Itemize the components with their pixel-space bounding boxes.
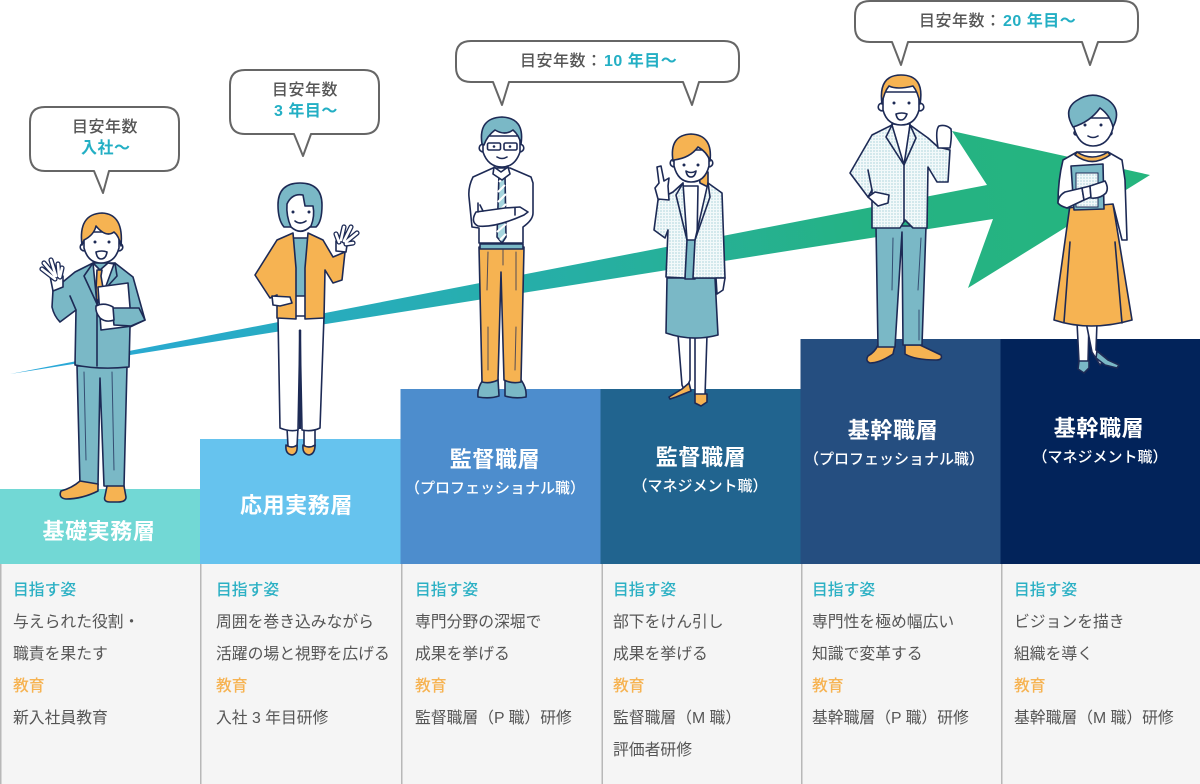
text block: 監督職層 M: 目指す姿 — [613, 581, 676, 599]
text block: 監督職層 P: 教育 — [415, 677, 447, 695]
illustration: male supervisor with glasses — [469, 117, 533, 398]
text block: 監督職層 M: 部下をけん引し — [613, 613, 724, 631]
text block: 基幹職層 M: 教育 — [1014, 677, 1046, 695]
text block: 基幹職層 M: 組織を導く — [1014, 644, 1093, 663]
step: 基幹職層 マネジメント職 — [1000, 339, 1200, 564]
text block: 監督職層 M — [613, 581, 741, 759]
callout: 10 年目〜: 目安年数： — [520, 53, 603, 70]
text block: 基幹職層 P — [812, 581, 969, 727]
text block: 監督職層 P: 成果を挙げる — [415, 645, 510, 663]
panel: lower background — [0, 564, 1200, 784]
text block: 基礎実務層: 新入社員教育 — [13, 709, 108, 727]
callout: 3 年目〜 — [230, 70, 379, 156]
step: 基幹職層 マネジメント職: （マネジメント職） — [1032, 449, 1168, 466]
illustration: female senior manager — [1054, 95, 1132, 373]
callout: 10 年目〜 — [456, 41, 739, 105]
step: 応用実務層: 応用実務層 — [240, 493, 353, 518]
text block: 監督職層 P: 監督職層（P 職）研修 — [415, 709, 572, 727]
text block: 応用実務層: 入社 3 年目研修 — [216, 709, 329, 727]
illustration: new employee — [42, 213, 145, 502]
callout: 20 年目〜: 20 年目〜 — [1003, 11, 1076, 30]
text block: 監督職層 P: 目指す姿 — [415, 581, 478, 599]
callout: 20 年目〜: 目安年数： — [919, 13, 1002, 30]
text block: 監督職層 M: 成果を挙げる — [613, 645, 708, 663]
growth arrow — [10, 131, 1150, 374]
step: 基幹職層 プロフェッショナル職: （プロフェッショナル職） — [804, 451, 984, 468]
step: 監督職層 マネジメント職 — [600, 389, 800, 564]
illustration: male senior professional — [850, 75, 951, 363]
text block: 基幹職層 M: 基幹職層（M 職）研修 — [1014, 709, 1174, 727]
step: 監督職層 マネジメント職: （マネジメント職） — [632, 478, 768, 495]
text block: 基幹職層 P: 知識で変革する — [812, 645, 923, 663]
text block: 基幹職層 P: 専門性を極め幅広い — [812, 613, 954, 631]
text block: 応用実務層: 活躍の場と視野を広げる — [216, 645, 390, 663]
callout: 入社〜: 目安年数 — [72, 118, 138, 136]
text block: 基礎実務層: 与えられた役割・ — [13, 613, 139, 631]
callout: 3 年目〜: 3 年目〜 — [274, 101, 338, 120]
text block: 基礎実務層 — [13, 581, 139, 727]
step: 監督職層 プロフェッショナル職: （プロフェッショナル職） — [405, 480, 585, 497]
text block: 監督職層 P: 専門分野の深堀で — [415, 613, 541, 631]
step: 基幹職層 プロフェッショナル職 — [800, 339, 1000, 564]
step: 基幹職層 マネジメント職: 基幹職層 — [1054, 416, 1144, 441]
text block: 基幹職層 P: 目指す姿 — [812, 581, 875, 599]
illustration: female supervisor pointing — [654, 134, 725, 406]
text block: 基幹職層 M: 目指す姿 — [1014, 581, 1077, 599]
callout: 入社〜: 入社〜 — [81, 139, 131, 157]
callout: 3 年目〜: 目安年数 — [272, 81, 338, 99]
step: 基礎実務層: 基礎実務層 — [42, 519, 156, 544]
step: 応用実務層 — [200, 439, 400, 564]
text block: 応用実務層: 目指す姿 — [216, 581, 279, 599]
step: 監督職層 プロフェッショナル職: 監督職層 — [450, 447, 540, 472]
illustration: female employee waving — [255, 183, 357, 455]
text block: 監督職層 M: 監督職層（M 職） — [613, 709, 741, 727]
text block: 監督職層 M: 教育 — [613, 677, 645, 695]
text block: 監督職層 P — [415, 581, 572, 727]
text block: 応用実務層: 周囲を巻き込みながら — [216, 613, 374, 631]
callout: 20 年目〜 — [855, 1, 1138, 65]
callout: 10 年目〜: 10 年目〜 — [604, 51, 677, 70]
text block: 応用実務層 — [216, 581, 390, 727]
text block: 基礎実務層: 職責を果たす — [13, 645, 108, 663]
step: 監督職層 プロフェッショナル職 — [400, 389, 600, 564]
text block: 基礎実務層: 目指す姿 — [13, 581, 76, 599]
step: 基礎実務層 — [0, 489, 200, 564]
step: 監督職層 マネジメント職: 監督職層 — [656, 445, 746, 470]
text block: 基幹職層 M: ビジョンを描き — [1014, 613, 1125, 631]
text block: 応用実務層: 教育 — [216, 677, 248, 695]
callout: 入社〜 — [30, 107, 179, 193]
text block: 監督職層 M: 評価者研修 — [613, 741, 692, 759]
step: 基幹職層 プロフェッショナル職: 基幹職層 — [848, 418, 938, 443]
text block: 基礎実務層: 教育 — [13, 677, 45, 695]
text block: 基幹職層 P: 基幹職層（P 職）研修 — [812, 709, 969, 727]
text block: 基幹職層 M — [1014, 581, 1174, 727]
text block: 基幹職層 P: 教育 — [812, 677, 844, 695]
